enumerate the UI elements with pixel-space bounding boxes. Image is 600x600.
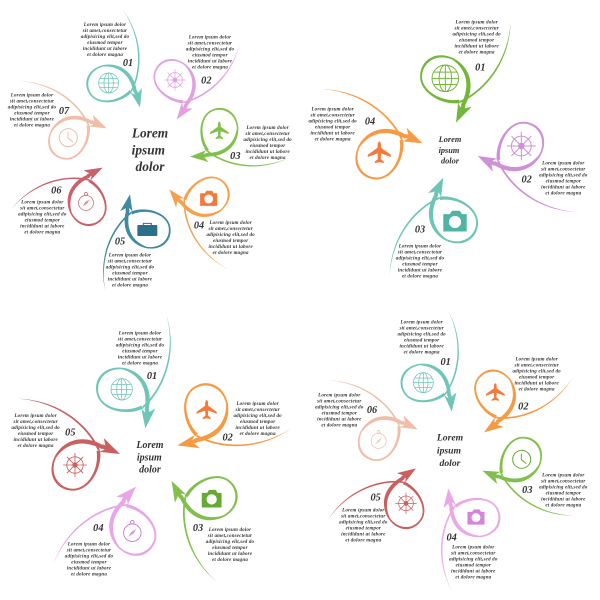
text block 02: eiusmod tempor xyxy=(192,53,228,58)
text block 02: eiusmod tempor xyxy=(240,420,275,425)
arrow swirl 02 xyxy=(463,342,581,434)
step 07 xyxy=(0,66,108,170)
icon: ship wheel xyxy=(395,493,417,514)
text block 04: adipisicing elit,sed do xyxy=(65,555,114,560)
center title: Lorem xyxy=(131,126,168,141)
text block 06: et dolore magna xyxy=(24,231,61,236)
text block 03: eiusmod tempor xyxy=(250,144,285,149)
text block 04: eiusmod tempor xyxy=(315,126,350,131)
step 01 xyxy=(397,305,468,412)
number 06: 06 xyxy=(51,185,62,196)
step 04 xyxy=(432,488,504,597)
icon: ship wheel xyxy=(507,132,536,160)
step 01 xyxy=(408,0,528,124)
text block 04: Lorem ipsum dolor xyxy=(310,108,354,113)
text block 02: eiusmod tempor xyxy=(519,375,554,380)
text block 02: Lorem ipsum dolor xyxy=(541,162,585,167)
arrow swirl 05 xyxy=(87,193,179,306)
text block 01: Lorem ipsum dolor xyxy=(118,332,161,337)
text block 01: adipisicing elit,sed do xyxy=(81,35,130,40)
text block 05: sit amet,consectetur xyxy=(340,514,386,519)
text block 05: et dolore magna xyxy=(112,283,148,288)
icon: compass xyxy=(124,520,141,541)
number 05: 05 xyxy=(371,493,381,504)
step 06 xyxy=(7,166,116,244)
text block 05: Lorem ipsum dolor xyxy=(341,508,385,513)
center title: Lorem xyxy=(135,440,164,451)
text block 03: incididunt ut labore xyxy=(541,497,586,502)
arrow swirl 07 xyxy=(0,66,108,170)
text block 05: sit amet,consectetur xyxy=(107,259,152,264)
text block 01: et dolore magna xyxy=(459,51,495,56)
icon: briefcase xyxy=(137,223,157,236)
step 06 xyxy=(305,365,419,472)
text block 06: Lorem ipsum dolor xyxy=(20,201,64,206)
step 03 xyxy=(481,426,596,532)
number 01: 01 xyxy=(441,357,451,368)
text block 06: sit amet,consectetur xyxy=(316,400,362,405)
text block 04: et dolore magna xyxy=(315,138,351,143)
arrow swirl 03 xyxy=(373,176,490,301)
text block 02: incididunt ut labore xyxy=(514,381,559,386)
step 04 xyxy=(168,166,261,278)
text block 07: adipisicing elit,sed do xyxy=(8,106,57,111)
text block 02: incididunt ut labore xyxy=(188,59,233,64)
step 04 xyxy=(296,72,424,192)
text block 03: adipisicing elit,sed do xyxy=(539,485,588,490)
text block 01: eiusmod tempor xyxy=(87,41,123,46)
number 02: 02 xyxy=(522,174,532,185)
icon: clock xyxy=(59,129,77,147)
text block 04: et dolore magna xyxy=(71,573,107,578)
center title: dolor xyxy=(136,159,165,174)
text block 01: incididunt ut labore xyxy=(454,45,499,50)
text block 01: incididunt ut labore xyxy=(83,47,128,52)
text block 04: incididunt ut labore xyxy=(451,569,496,574)
text block 02: sit amet,consectetur xyxy=(513,363,559,368)
text block 07: incididunt ut labore xyxy=(10,118,55,123)
number 05: 05 xyxy=(65,427,75,438)
text block 02: adipisicing elit,sed do xyxy=(233,414,282,419)
text block 03: adipisicing elit,sed do xyxy=(396,257,445,262)
number 01: 01 xyxy=(147,371,157,382)
text block 03: et dolore magna xyxy=(545,503,582,508)
text block 05: sit amet,consectetur xyxy=(12,420,58,425)
text block 02: et dolore magna xyxy=(192,65,228,70)
icon: globe xyxy=(99,73,119,93)
text block 06: Lorem ipsum dolor xyxy=(317,394,361,399)
text block 03: eiusmod tempor xyxy=(546,491,581,496)
number 04: 04 xyxy=(447,532,457,543)
number 03: 03 xyxy=(522,485,532,496)
text block 04: Lorem ipsum dolor xyxy=(208,221,252,226)
text block 01: sit amet,consectetur xyxy=(398,327,444,332)
center title: ipsum xyxy=(439,146,460,155)
text block 07: sit amet,consectetur xyxy=(9,100,54,105)
text block 02: incididunt ut labore xyxy=(541,186,586,191)
panel: four step diagram xyxy=(296,0,600,301)
text block 01: adipisicing elit,sed do xyxy=(397,333,446,338)
text block 04: sit amet,consectetur xyxy=(207,227,253,232)
icon: clock xyxy=(513,450,531,468)
number 02: 02 xyxy=(201,76,211,87)
text block 01: sit amet,consectetur xyxy=(453,27,499,32)
step 01 xyxy=(88,301,188,429)
number 07: 07 xyxy=(59,106,70,117)
text block 03: sit amet,consectetur xyxy=(397,251,442,256)
text block 06: adipisicing elit,sed do xyxy=(18,213,67,218)
text block 06: eiusmod tempor xyxy=(25,219,60,224)
text block 04: Lorem ipsum dolor xyxy=(67,543,110,548)
icon: plane xyxy=(210,122,229,139)
text block 04: adipisicing elit,sed do xyxy=(308,120,357,125)
text block 03: Lorem ipsum dolor xyxy=(208,528,251,533)
text block 03: adipisicing elit,sed do xyxy=(206,540,255,545)
number 04: 04 xyxy=(93,523,103,534)
text block 04: sit amet,consectetur xyxy=(66,549,111,554)
text block 04: incididunt ut labore xyxy=(310,132,355,137)
text block 02: Lorem ipsum dolor xyxy=(235,402,279,407)
arrow swirl 01 xyxy=(86,9,142,107)
text block 06: incididunt ut labore xyxy=(20,225,65,230)
text block 05: incididunt ut labore xyxy=(108,277,153,282)
arrow swirl 03 xyxy=(169,466,258,589)
text block 06: incididunt ut labore xyxy=(317,418,362,423)
number 05: 05 xyxy=(115,237,125,248)
text block 05: adipisicing elit,sed do xyxy=(106,265,155,270)
text block 02: sit amet,consectetur xyxy=(234,408,280,413)
text block 05: eiusmod tempor xyxy=(112,271,148,276)
icon: camera xyxy=(200,191,217,206)
icon: globe xyxy=(111,379,132,400)
text block 02: incididunt ut labore xyxy=(235,426,280,431)
text block 05: adipisicing elit,sed do xyxy=(11,426,60,431)
text block 01: Lorem ipsum dolor xyxy=(83,23,126,28)
arrow swirl 02 xyxy=(476,109,600,229)
icon: compass xyxy=(371,430,386,448)
text block 03: eiusmod tempor xyxy=(212,546,248,551)
text block 05: eiusmod tempor xyxy=(18,432,53,437)
icon: globe xyxy=(432,65,459,92)
number 02: 02 xyxy=(518,401,528,412)
text block 05: Lorem ipsum dolor xyxy=(13,414,57,419)
text block 01: et dolore magna xyxy=(87,53,123,58)
text block 06: eiusmod tempor xyxy=(322,412,357,417)
text block 05: et dolore magna xyxy=(18,444,54,449)
text block 03: et dolore magna xyxy=(402,275,438,280)
text block 02: adipisicing elit,sed do xyxy=(512,369,561,374)
text block 06: et dolore magna xyxy=(321,424,358,429)
center title: ipsum xyxy=(132,143,165,158)
panel: six step diagram xyxy=(305,305,596,597)
text block 06: sit amet,consectetur xyxy=(19,207,65,212)
number 03: 03 xyxy=(193,523,203,534)
text block 03: sit amet,consectetur xyxy=(207,534,252,539)
text block 02: et dolore magna xyxy=(545,192,582,197)
text block 02: adipisicing elit,sed do xyxy=(186,47,235,52)
text block 02: Lorem ipsum dolor xyxy=(514,357,558,362)
text block 02: adipisicing elit,sed do xyxy=(539,174,588,179)
text block 04: eiusmod tempor xyxy=(71,561,107,566)
icon: plane xyxy=(486,383,505,401)
text block 02: sit amet,consectetur xyxy=(187,41,232,46)
arrow swirl 01 xyxy=(88,301,188,429)
center title: Lorem xyxy=(436,432,464,443)
icon: plane xyxy=(197,400,217,419)
text block 02: sit amet,consectetur xyxy=(540,168,586,173)
text block 04: sit amet,consectetur xyxy=(309,114,355,119)
text block 05: Lorem ipsum dolor xyxy=(108,253,151,258)
icon: ship wheel xyxy=(164,69,186,91)
panel: seven step diagram xyxy=(0,9,296,306)
step 01 xyxy=(81,9,142,107)
text block 02: et dolore magna xyxy=(240,432,276,437)
text block 06: adipisicing elit,sed do xyxy=(315,406,364,411)
arrow swirl 06 xyxy=(305,365,419,472)
text block 03: sit amet,consectetur xyxy=(244,132,290,137)
arrow swirl 04 xyxy=(168,166,261,278)
text block 07: et dolore magna xyxy=(14,124,50,129)
text block 01: Lorem ipsum dolor xyxy=(454,21,498,26)
number 03: 03 xyxy=(230,151,240,162)
number 06: 06 xyxy=(367,405,378,416)
text block 03: eiusmod tempor xyxy=(402,263,438,268)
arrow swirl 01 xyxy=(397,305,468,412)
step 02 xyxy=(463,342,581,434)
text block 07: eiusmod tempor xyxy=(14,112,50,117)
number 04: 04 xyxy=(365,116,375,127)
text block 04: et dolore magna xyxy=(213,251,249,256)
text block 03: Lorem ipsum dolor xyxy=(541,473,585,478)
text block 04: incididunt ut labore xyxy=(208,245,253,250)
text block 01: eiusmod tempor xyxy=(122,350,158,355)
text block 02: eiusmod tempor xyxy=(546,180,581,185)
step 03 xyxy=(169,466,258,589)
number 01: 01 xyxy=(475,63,485,74)
text block 04: adipisicing elit,sed do xyxy=(449,557,498,562)
icon: plane xyxy=(368,141,391,163)
text block 04: eiusmod tempor xyxy=(213,239,248,244)
number 04: 04 xyxy=(194,221,204,232)
step 02 xyxy=(177,382,293,450)
step 02 xyxy=(142,15,253,121)
text block 04: Lorem ipsum dolor xyxy=(451,545,495,550)
arrow swirl 03 xyxy=(190,104,296,177)
arrow swirl 01 xyxy=(408,0,528,124)
arrow swirl 04 xyxy=(41,485,169,599)
text block 01: incididunt ut labore xyxy=(118,356,163,361)
center title: ipsum xyxy=(137,453,162,464)
number 03: 03 xyxy=(415,225,425,236)
center title: dolor xyxy=(441,156,460,165)
arrow swirl 05 xyxy=(0,381,121,503)
center title: dolor xyxy=(440,458,461,469)
arrow swirl 02 xyxy=(177,382,293,450)
step 03 xyxy=(373,176,490,301)
text block 03: Lorem ipsum dolor xyxy=(245,126,289,131)
arrow swirl 06 xyxy=(7,166,116,244)
text block 01: adipisicing elit,sed do xyxy=(116,344,165,349)
text block 03: Lorem ipsum dolor xyxy=(398,245,441,250)
arrow swirl 05 xyxy=(321,466,435,554)
icon: camera xyxy=(443,211,467,231)
text block 01: et dolore magna xyxy=(122,362,158,367)
text block 04: sit amet,consectetur xyxy=(450,551,496,556)
step 05 xyxy=(321,466,435,554)
number 01: 01 xyxy=(123,58,133,69)
step 05 xyxy=(87,193,179,306)
text block 03: sit amet,consectetur xyxy=(540,479,586,484)
center title: Lorem xyxy=(438,135,462,144)
text block 04: eiusmod tempor xyxy=(456,563,491,568)
step 02 xyxy=(476,109,600,229)
text block 02: Lorem ipsum dolor xyxy=(188,35,231,40)
text block 03: adipisicing elit,sed do xyxy=(243,138,292,143)
text block 01: et dolore magna xyxy=(404,351,440,356)
icon: globe xyxy=(413,373,433,393)
text block 01: sit amet,consectetur xyxy=(82,29,127,34)
text block 01: eiusmod tempor xyxy=(404,339,439,344)
icon: camera xyxy=(467,509,485,525)
icon: camera xyxy=(202,490,222,507)
text block 03: incididunt ut labore xyxy=(398,269,443,274)
text block 05: incididunt ut labore xyxy=(341,532,386,537)
text block 04: incididunt ut labore xyxy=(67,567,112,572)
text block 07: Lorem ipsum dolor xyxy=(10,94,53,99)
panel: five step diagram xyxy=(0,301,293,599)
text block 04: adipisicing elit,sed do xyxy=(206,233,255,238)
step 05 xyxy=(0,381,121,503)
text block 01: adipisicing elit,sed do xyxy=(452,33,501,38)
text block 03: et dolore magna xyxy=(212,558,248,563)
text block 04: et dolore magna xyxy=(455,575,492,580)
arrow swirl 04 xyxy=(296,72,424,192)
center title: dolor xyxy=(139,464,161,475)
text block 05: et dolore magna xyxy=(345,538,382,543)
center title: ipsum xyxy=(437,446,462,457)
text block 01: Lorem ipsum dolor xyxy=(399,321,443,326)
text block 01: incididunt ut labore xyxy=(399,345,444,350)
step 03 xyxy=(190,104,296,177)
arrow swirl 03 xyxy=(481,426,596,532)
step 04 xyxy=(41,485,169,599)
text block 03: incididunt ut labore xyxy=(208,552,253,557)
icon: ship wheel xyxy=(63,453,87,477)
number 02: 02 xyxy=(223,433,233,444)
text block 02: et dolore magna xyxy=(519,387,555,392)
arrow swirl 04 xyxy=(432,488,504,597)
text block 01: eiusmod tempor xyxy=(459,39,494,44)
text block 05: adipisicing elit,sed do xyxy=(339,520,388,525)
arrow swirl 02 xyxy=(142,15,253,121)
text block 01: sit amet,consectetur xyxy=(117,338,162,343)
text block 03: incididunt ut labore xyxy=(245,150,290,155)
text block 05: eiusmod tempor xyxy=(346,526,381,531)
text block 05: incididunt ut labore xyxy=(13,438,58,443)
icon: compass xyxy=(78,192,93,210)
text block 03: et dolore magna xyxy=(250,156,286,161)
